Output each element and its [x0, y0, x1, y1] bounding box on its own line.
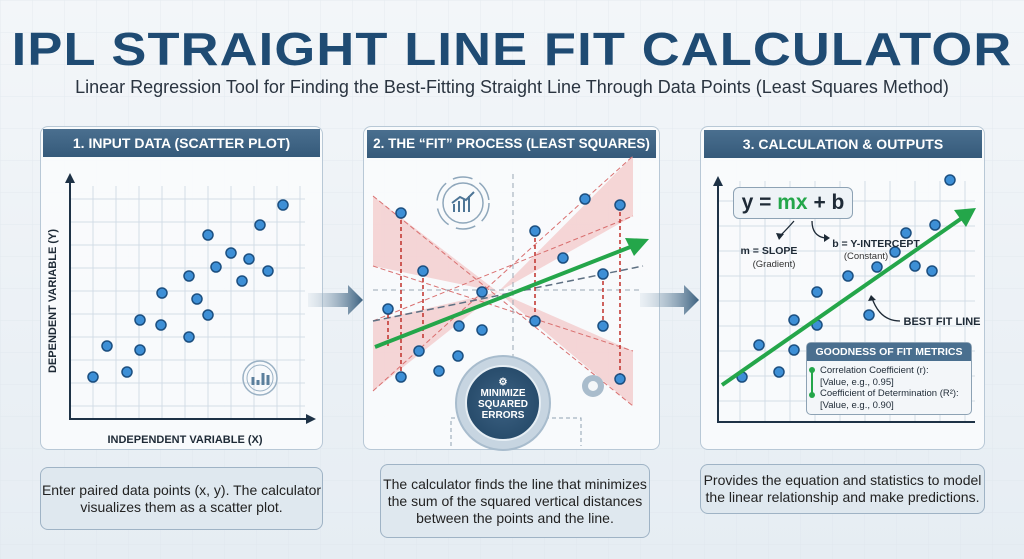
caption: panel 3: [700, 464, 985, 514]
metrics box: Correlation Coefficient (r):: [820, 365, 929, 376]
metrics box: [Value, e.g., 0.90]: [820, 400, 894, 410]
metrics box: [806, 342, 972, 415]
scatter plot: INDEPENDENT VARIABLE (X): [107, 434, 263, 446]
regression chart: b = Y-INTERCEPT: [832, 238, 920, 250]
metrics box: Coefficient of Determination (R²):: [820, 388, 959, 399]
heading: panel 3: 3. CALCULATION & OUTPUTS: [743, 136, 943, 152]
title: IPL STRAIGHT LINE FIT CALCULATOR: [12, 23, 1012, 75]
least squares chart: [372, 156, 649, 446]
gauge: minimize squared errors: MINIMIZE: [480, 388, 526, 399]
scatter plot: DEPENDENT VARIABLE (Y): [47, 229, 59, 373]
gauge: minimize squared errors: SQUARED: [478, 399, 528, 410]
caption: panel 2: between the points and the line.: [416, 510, 614, 526]
regression chart: BEST FIT LINE: [904, 316, 980, 328]
heading: panel 2: [367, 130, 656, 158]
panel: calculation & outputs: [700, 126, 985, 450]
equation box: [733, 187, 853, 219]
heading: panel 1: [43, 129, 320, 157]
scatter plot: [47, 173, 316, 446]
heading: panel 1: 1. INPUT DATA (SCATTER PLOT): [73, 135, 290, 151]
caption: panel 3: the linear relationship and make predictions.: [706, 489, 979, 505]
arrow: 2 to 3: [640, 285, 699, 315]
regression chart: m = SLOPE: [741, 245, 797, 257]
gauge: minimize squared errors: ERRORS: [482, 410, 524, 421]
heading: panel 2: 2. THE “FIT” PROCESS (LEAST SQUARES): [373, 136, 650, 151]
equation box: y = mx + b: [742, 191, 844, 214]
caption: panel 1: visualizes them as a scatter plot.: [80, 498, 283, 514]
subtitle: Linear Regression Tool for Finding the Best-Fitting Straight Line Through Data Points (Least Squares Method): [75, 77, 949, 97]
caption: panel 2: [380, 464, 650, 538]
caption: panel 3: Provides the equation and statistics to model: [704, 472, 981, 488]
panel: input data: [40, 126, 323, 450]
caption: panel 1: Enter paired data points (x, y). The calculator: [42, 482, 321, 498]
caption: panel 2: the sum of the squared vertical distances: [388, 492, 642, 508]
caption: panel 1: [40, 467, 323, 530]
regression chart: (Gradient): [753, 259, 795, 270]
arrow: 1 to 2: [308, 285, 363, 315]
heading: panel 3: [704, 130, 982, 158]
metrics box: GOODNESS OF FIT METRICS: [815, 346, 962, 358]
regression chart: [713, 174, 980, 423]
panel: fit process: [363, 126, 660, 450]
metrics box: [Value, e.g., 0.95]: [820, 376, 894, 388]
regression chart: (Constant): [844, 251, 888, 262]
gauge: minimize squared errors: [455, 355, 551, 451]
caption: panel 2: The calculator finds the line that minimizes: [383, 476, 647, 492]
gauge: minimize squared errors: ⚙: [499, 377, 507, 388]
